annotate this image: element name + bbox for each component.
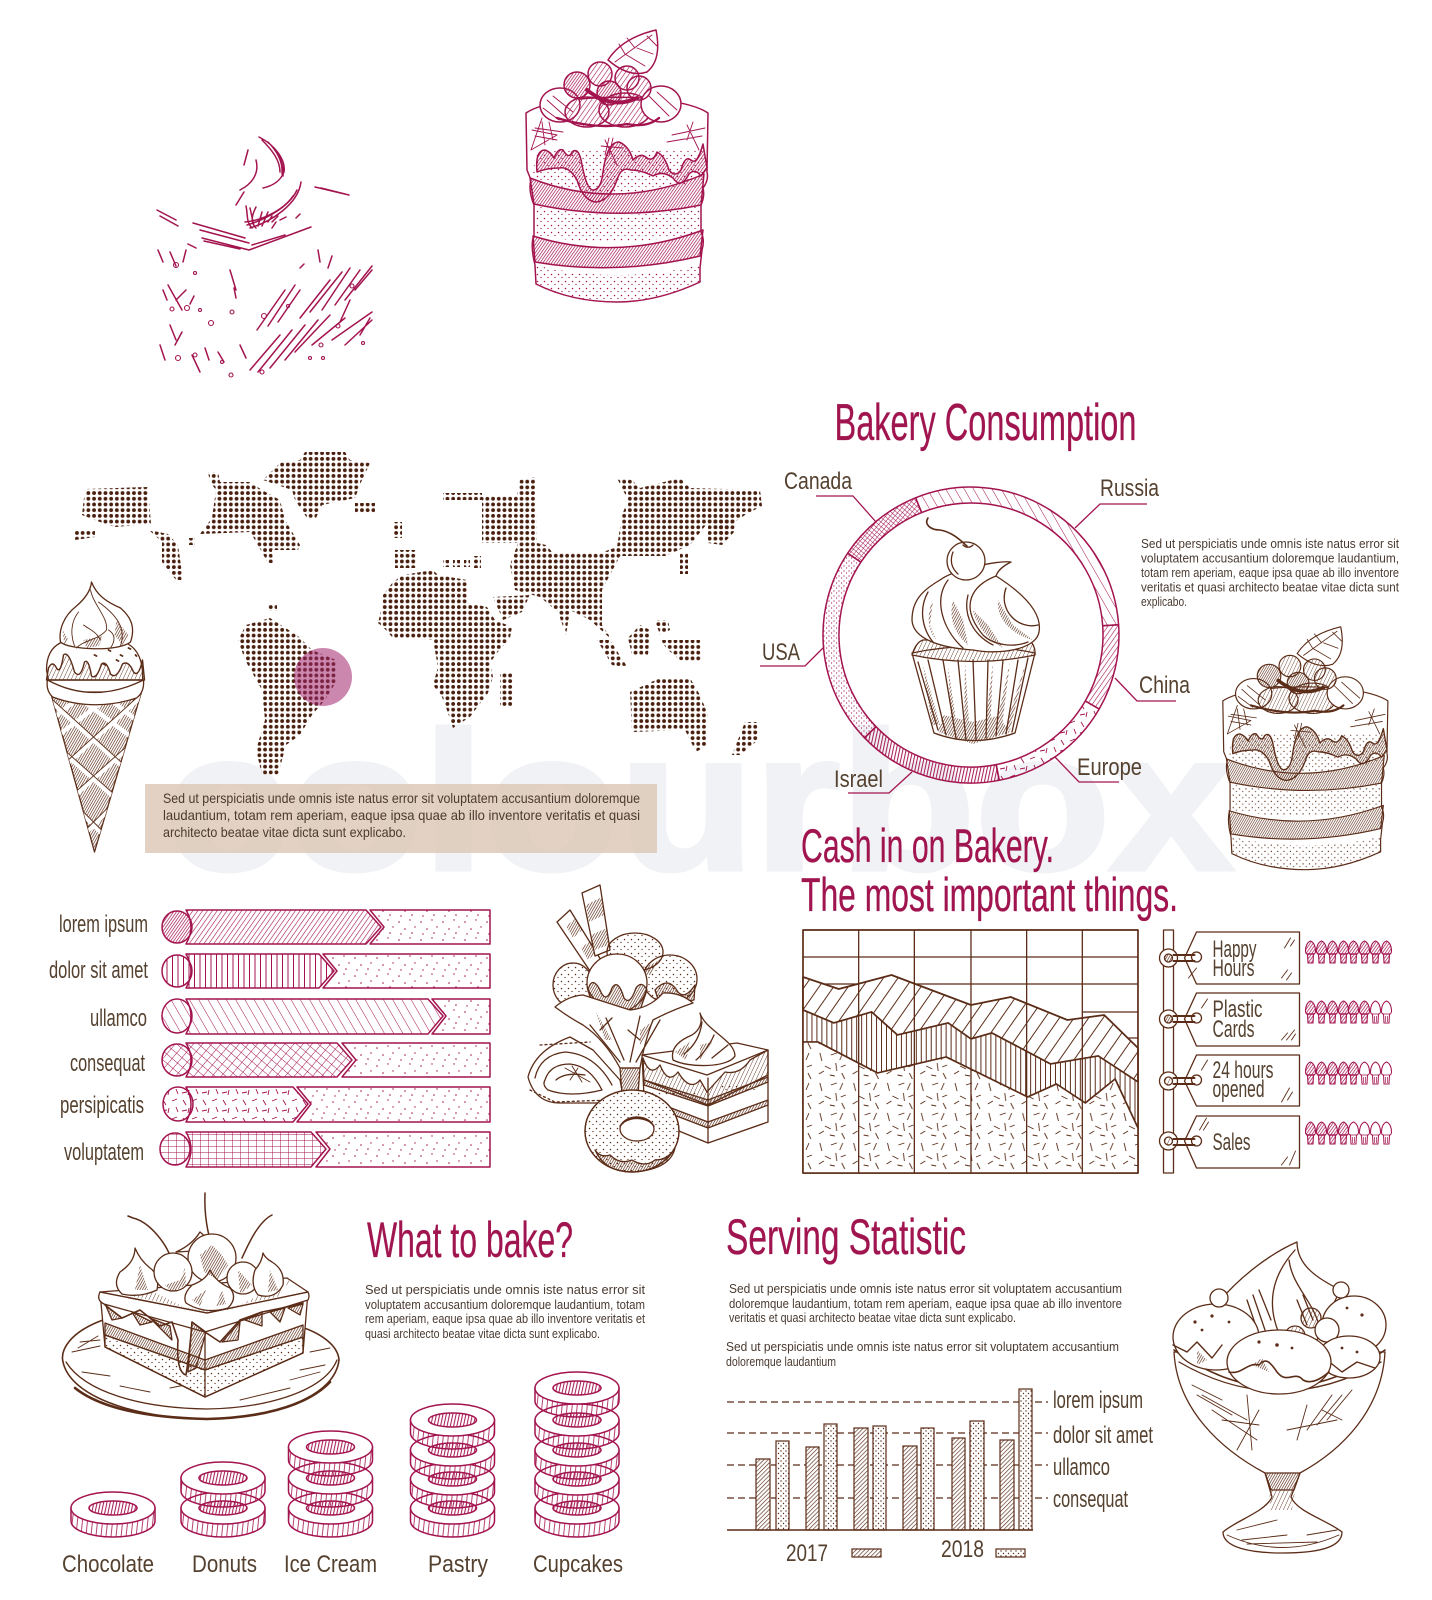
segment: China bbox=[1085, 625, 1119, 709]
illustration: pink layered cake bbox=[526, 30, 708, 302]
sketch: cake block bbox=[99, 1278, 309, 1397]
legend: 2017 bbox=[786, 1540, 881, 1567]
sketch: plate bbox=[62, 1320, 339, 1419]
text block: what to bake: Sed ut perspiciatis unde omnis iste natus error sit bbox=[365, 1282, 645, 1297]
title: Cash in on Bakery: Cash in on Bakery. bbox=[801, 819, 1054, 872]
stack: Chocolate bbox=[62, 1492, 155, 1578]
text box: tan caption: laudantium, totam rem aperiam, eaque ipsa quae ab illo inventore veritatis et quasi bbox=[163, 807, 640, 823]
text block: what to bake: voluptatem accusantium doloremque laudantium, totam bbox=[365, 1297, 645, 1312]
bars: 2017 series bbox=[756, 1428, 1014, 1530]
chart labels: ullamco bbox=[1053, 1454, 1110, 1481]
text block: serving first paragraph: doloremque laudantium, totam rem aperiam, eaque ipsa quae ab illo inventore bbox=[729, 1296, 1122, 1311]
tag: Happy Hours: Hours bbox=[1212, 955, 1254, 982]
bar row: persipicatis: persipicatis bbox=[60, 1092, 144, 1119]
bar row: consequat bbox=[70, 1043, 490, 1077]
sketch: wafer rolls bbox=[557, 885, 610, 974]
illustration: cupcake with cherry bbox=[912, 518, 1039, 744]
label: Russia bbox=[1075, 475, 1160, 528]
legend: 2017: 2017 bbox=[786, 1540, 828, 1567]
text block: serving second paragraph bbox=[726, 1339, 1119, 1369]
text block: serving first paragraph: Sed ut perspiciatis unde omnis iste natus error sit voluptatem accusantium bbox=[729, 1281, 1122, 1296]
tag: Plastic Cards bbox=[1174, 993, 1300, 1046]
label: China: China bbox=[1139, 672, 1191, 699]
illustration: faded cake slice bbox=[157, 137, 372, 372]
tag: Happy Hours bbox=[1174, 932, 1300, 984]
bar row: ullamco bbox=[90, 999, 490, 1034]
title: Cash in on Bakery: The most important things. bbox=[801, 868, 1178, 921]
bars: 2018 series bbox=[776, 1389, 1032, 1530]
area band: top bbox=[803, 975, 1138, 1082]
chart labels: lorem ipsum bbox=[1053, 1387, 1143, 1414]
dotted world map bbox=[75, 452, 762, 775]
area band: bottom bbox=[803, 1042, 1138, 1173]
label: China bbox=[1115, 672, 1191, 701]
stack: Donuts: Donuts bbox=[192, 1551, 257, 1578]
stack: Ice Cream bbox=[284, 1431, 377, 1578]
label: Israel: Israel bbox=[834, 766, 883, 793]
title: Serving Statistic: Serving Statistic bbox=[726, 1209, 966, 1265]
sketch: scoops bbox=[1173, 1282, 1386, 1394]
bar row: voluptatem bbox=[64, 1132, 490, 1167]
icon row: Happy Hours rating bbox=[1306, 941, 1392, 963]
sketch: glass bowl bbox=[1174, 1350, 1385, 1553]
bar row: voluptatem: voluptatem bbox=[64, 1139, 144, 1166]
illustration: faded cake crumbs bbox=[170, 262, 364, 377]
text block: consumption note: Sed ut perspiciatis unde omnis iste natus error sit bbox=[1141, 536, 1399, 551]
stack: Ice Cream: Ice Cream bbox=[284, 1551, 377, 1578]
chart labels bbox=[1053, 1387, 1153, 1513]
tag pole bbox=[1160, 930, 1178, 1173]
bar row: dolor sit amet bbox=[49, 954, 490, 988]
illustration: cake slice on plate bbox=[62, 1193, 339, 1419]
tag: Happy Hours: Happy bbox=[1212, 936, 1256, 963]
text box: tan caption bbox=[145, 784, 657, 853]
sketch: meringues and cherries bbox=[116, 1193, 283, 1311]
tag: 24 hours opened: opened bbox=[1212, 1076, 1264, 1103]
illustration: ice cream cone bbox=[38, 582, 148, 855]
stack: Cupcakes bbox=[533, 1372, 623, 1578]
illustration: assorted desserts bbox=[528, 885, 768, 1172]
map highlight: Brazil marker bbox=[294, 648, 352, 706]
tag: Sales: Sales bbox=[1212, 1129, 1250, 1156]
donut stack chart bbox=[62, 1372, 623, 1578]
text block: serving first paragraph bbox=[729, 1281, 1122, 1325]
area chart bbox=[803, 930, 1138, 1173]
legend: 2018 bbox=[941, 1536, 1025, 1563]
stack: Pastry: Pastry bbox=[428, 1551, 488, 1578]
bar row: lorem ipsum: lorem ipsum bbox=[59, 911, 148, 938]
sketch: swiss roll bbox=[528, 1037, 624, 1103]
label: USA: USA bbox=[762, 639, 800, 666]
bar row: lorem ipsum bbox=[59, 910, 490, 944]
bar chart: serving statistic bbox=[727, 1387, 1153, 1567]
label: Europe: Europe bbox=[1077, 754, 1142, 781]
icon row: Plastic Cards rating bbox=[1306, 1001, 1392, 1023]
text box: tan caption: architecto beatae vitae dicta sunt explicabo. bbox=[163, 824, 406, 840]
illustration: ice cream sundae bbox=[1173, 1242, 1386, 1553]
label: Canada bbox=[784, 468, 876, 522]
illustration: brown layered cake bbox=[1223, 627, 1388, 870]
tag: Plastic Cards: Plastic bbox=[1212, 996, 1262, 1023]
chart labels: consequat bbox=[1053, 1486, 1128, 1513]
segment: USA bbox=[823, 553, 876, 738]
text block: consumption note: veritatis et quasi architecto beatae vitae dicta sunt bbox=[1141, 580, 1399, 594]
tag: Plastic Cards: Cards bbox=[1212, 1016, 1254, 1043]
segment: Israel bbox=[864, 727, 999, 783]
bar row: consequat: consequat bbox=[70, 1050, 145, 1077]
sketch: ice cream tulip bbox=[553, 933, 697, 1094]
text block: serving second paragraph: Sed ut perspiciatis unde omnis iste natus error sit voluptatem accusantium bbox=[726, 1339, 1119, 1354]
text block: consumption note: explicabo. bbox=[1141, 594, 1187, 609]
text block: what to bake: rem aperiam, eaque ipsa quae ab illo inventore veritatis et bbox=[365, 1311, 645, 1326]
text block: what to bake: quasi architecto beatae vitae dicta sunt explicabo. bbox=[365, 1326, 600, 1341]
horizontal bars panel bbox=[49, 910, 490, 1167]
bar row: persipicatis bbox=[60, 1087, 490, 1122]
text block: consumption note: voluptatem accusantium doloremque laudantium, bbox=[1141, 550, 1399, 566]
watermark: colourbox bbox=[165, 692, 1233, 911]
chart labels: dolor sit amet bbox=[1053, 1422, 1153, 1449]
tag: 24 hours opened: 24 hours bbox=[1212, 1057, 1274, 1084]
label: Europe bbox=[1055, 754, 1142, 782]
title: Bakery Consumption: Bakery Consumption bbox=[834, 394, 1136, 452]
label: Canada: Canada bbox=[784, 468, 853, 495]
text box: tan caption: Sed ut perspiciatis unde omnis iste natus error sit voluptatem accusantium doloremque bbox=[163, 790, 640, 806]
segment: Russia bbox=[916, 487, 1119, 626]
tag: Sales bbox=[1174, 1116, 1300, 1168]
text block: consumption note bbox=[1141, 536, 1399, 609]
icon row: 24 hours rating bbox=[1306, 1062, 1392, 1084]
sketch: swirl bbox=[1218, 1242, 1340, 1350]
text block: what to bake bbox=[365, 1282, 645, 1341]
stack: Chocolate: Chocolate bbox=[62, 1551, 154, 1578]
text block: serving first paragraph: veritatis et quasi architecto beatae vitae dicta sunt explicabo. bbox=[729, 1310, 1016, 1325]
sketch: donut bbox=[585, 1090, 679, 1172]
stack: Cupcakes: Cupcakes bbox=[533, 1551, 623, 1578]
title: What to bake?: What to bake? bbox=[367, 1212, 573, 1268]
title: Cash in on Bakery bbox=[801, 819, 1178, 921]
tag: 24 hours opened bbox=[1174, 1055, 1300, 1106]
bar row: dolor sit amet: dolor sit amet bbox=[49, 957, 148, 984]
stack: Donuts bbox=[181, 1462, 265, 1578]
stack: Pastry bbox=[410, 1404, 494, 1578]
icon row: Sales rating bbox=[1306, 1122, 1392, 1144]
legend: 2018: 2018 bbox=[941, 1536, 984, 1563]
ring chart: consumption by country bbox=[823, 487, 1119, 783]
tags panel bbox=[1160, 930, 1392, 1173]
sketch: cake slice bbox=[642, 1013, 768, 1143]
bar row: ullamco: ullamco bbox=[90, 1005, 147, 1032]
area band: middle bbox=[803, 1010, 1138, 1128]
map: Alaska bbox=[82, 487, 151, 527]
text block: serving second paragraph: doloremque laudantium bbox=[726, 1354, 836, 1369]
segment: Europe bbox=[996, 701, 1099, 780]
label: Russia: Russia bbox=[1100, 475, 1160, 502]
segment: Canada bbox=[848, 498, 922, 562]
